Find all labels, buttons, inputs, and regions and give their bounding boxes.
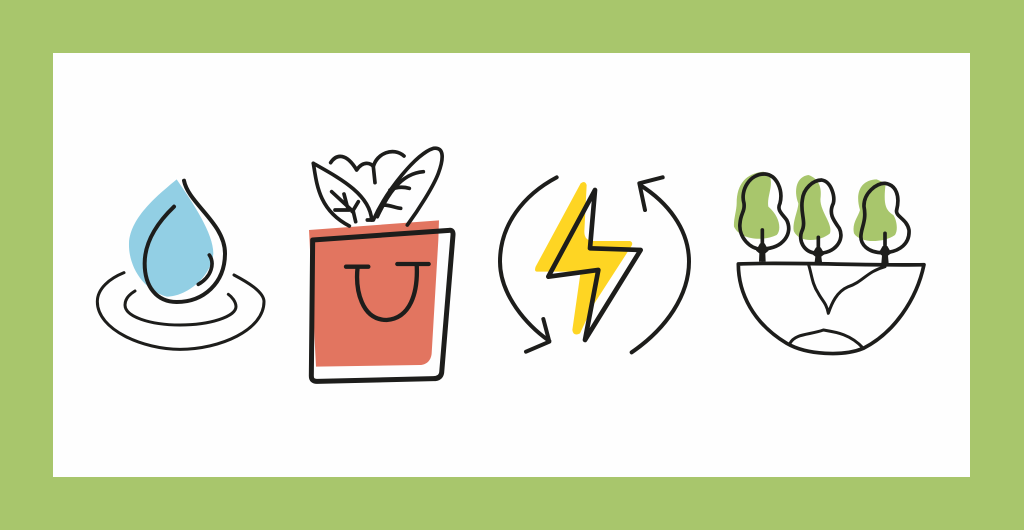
bolt outline: [548, 190, 641, 340]
half globe outline: [738, 263, 924, 354]
icon: water drop with ripples: [97, 179, 264, 349]
bag outline: [311, 230, 453, 381]
right leaf: [367, 148, 442, 225]
icon: shopping bag with leaves: [309, 148, 453, 381]
tree two trunk flare: [812, 247, 825, 262]
water drop blue fill: [129, 179, 213, 297]
bag handle: [346, 264, 429, 320]
icon: trees on half globe: [734, 172, 924, 354]
left cycle arrow: [500, 177, 557, 352]
tree three trunk flare: [879, 246, 891, 263]
icon: lightning bolt with cycle arrows: [500, 177, 689, 352]
drop highlight stroke: [198, 255, 212, 284]
tree three green fill: [854, 179, 897, 241]
tree two green fill: [794, 175, 830, 240]
tree one green fill: [734, 172, 779, 239]
right cycle arrow: [632, 177, 689, 352]
bolt yellow fill: [535, 182, 632, 334]
water drop outline: [145, 181, 225, 302]
outer ripple: [97, 273, 264, 349]
white panel: [53, 53, 970, 477]
inner ripple: [125, 291, 236, 325]
tree one trunk flare: [756, 243, 769, 262]
tree two outline: [801, 180, 841, 260]
globe continents: [790, 264, 885, 348]
tree three outline: [861, 183, 909, 262]
left leaf: [313, 163, 372, 226]
tree one outline: [740, 174, 789, 260]
bag red fill: [309, 220, 439, 367]
middle leaf: [331, 152, 404, 183]
